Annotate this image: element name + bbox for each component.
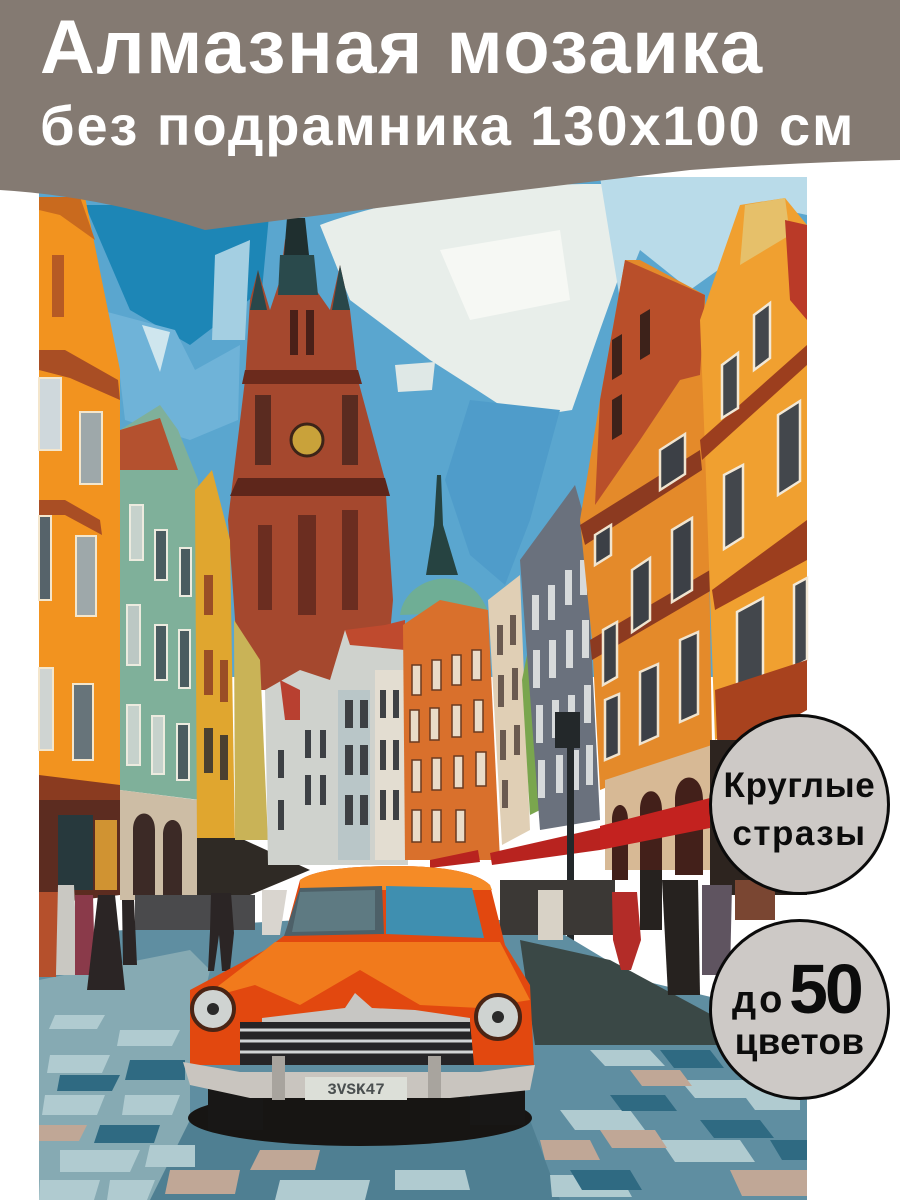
- sky: [39, 177, 807, 677]
- crowd right: [500, 870, 775, 995]
- red awnings: [430, 712, 807, 945]
- right orange building one: [580, 260, 712, 880]
- subtitle: без подрамника 130х100 см: [40, 94, 855, 157]
- car: [183, 866, 535, 1146]
- header banner: [0, 0, 900, 230]
- badge: round rhinestones: стразы: [732, 814, 867, 853]
- yellow building: [195, 470, 310, 895]
- pale building: [488, 575, 540, 845]
- grey building: [520, 485, 600, 830]
- badge: round rhinestones: Круглые: [724, 766, 875, 805]
- left orange building: [39, 197, 120, 905]
- distant white buildings: [265, 620, 408, 865]
- badge: up to 50 colours: [709, 919, 890, 1100]
- right orange building two: [700, 198, 807, 760]
- tower: [228, 215, 393, 690]
- dome: [400, 475, 488, 615]
- badge: up to 50 colours: 50: [789, 950, 861, 1028]
- crowd left: [39, 885, 287, 990]
- badge: round rhinestones: [709, 714, 890, 895]
- badge: up to 50 colours: цветов: [735, 1021, 864, 1062]
- title: Алмазная мозаика: [40, 5, 764, 90]
- cobblestones: [39, 1015, 807, 1200]
- street: [39, 920, 807, 1200]
- green building: [120, 405, 200, 900]
- badge: up to 50 colours: до: [732, 979, 785, 1021]
- orange middle building: [403, 600, 500, 860]
- license plate text: 3VSK47: [327, 1081, 385, 1099]
